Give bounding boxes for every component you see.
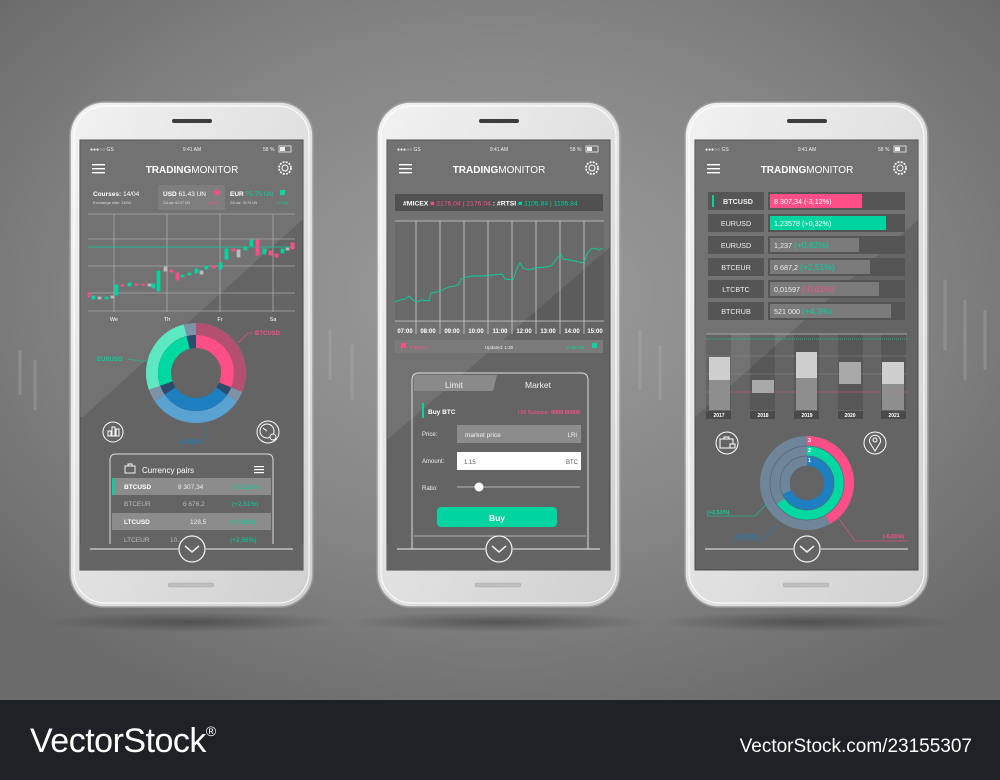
- ring chart labels: (-0,01%): [883, 534, 904, 540]
- line chart: 15:00: [587, 329, 603, 335]
- currency pairs panel: (+3,12%): [232, 484, 259, 491]
- header: TRADINGMONITOR: [453, 165, 545, 176]
- currency pairs panel: BTCEUR: [124, 501, 151, 508]
- phone 3: rates and statistics: [685, 102, 928, 607]
- ring chart labels: [707, 504, 908, 541]
- status bar: 58 %: [878, 147, 890, 153]
- courses row: EUR 75.75 UN: [230, 191, 273, 198]
- currency pairs panel: 8 307,34: [178, 484, 204, 491]
- line chart: 14:00: [564, 329, 580, 335]
- rate bars list: EURUSD: [721, 241, 751, 250]
- update bar: Updated: 1:30: [485, 345, 514, 350]
- courses row: USD 61.43 UN: [163, 191, 206, 198]
- currency pairs panel: (+2,66%): [230, 537, 257, 544]
- courses row: (+1.00): [277, 201, 288, 205]
- candlestick chart: Fr: [217, 317, 223, 323]
- yearly bar chart: 2021: [888, 413, 900, 419]
- phone 2: trade order: [377, 102, 620, 607]
- line chart: 07:00: [397, 329, 413, 335]
- scroll down button: [80, 536, 303, 570]
- donut labels: BTCUSD: [255, 331, 281, 337]
- rate bars list: 1,23578 (+0,32%): [774, 219, 831, 228]
- line chart: 11:00: [492, 329, 508, 335]
- line chart: [395, 221, 604, 335]
- currency pairs panel: [110, 454, 273, 548]
- courses row: 24Low: 62.07 UN: [163, 201, 191, 205]
- currency pairs panel: LTCUSD: [124, 519, 150, 526]
- status bar: ●●●○○ GS: [705, 147, 729, 153]
- order panel: LRI: [568, 433, 577, 439]
- update bar: 5 888.30: [410, 345, 428, 350]
- header: TRADINGMONITOR: [761, 165, 853, 176]
- order panel: Market: [525, 380, 552, 390]
- yearly bar chart: 2017: [713, 413, 725, 419]
- rate bars list: 521 000 (+4,3%): [774, 306, 832, 316]
- order panel: Buy: [489, 513, 505, 523]
- concentric ring chart: 2: [808, 448, 811, 454]
- rate bars list: 8 307,34 (-3,12%): [774, 197, 832, 206]
- status bar: [397, 146, 598, 153]
- rate bars list: 1,237 (+0,82%): [774, 240, 829, 250]
- status bar: ●●●○○ GS: [397, 147, 421, 153]
- rate bars list: 0,01597 (-0,01%): [774, 284, 835, 294]
- status bar: 58 %: [263, 147, 275, 153]
- status bar: ●●●○○ GS: [90, 147, 114, 153]
- ring chart labels: (+0,32%): [735, 534, 758, 540]
- currency pairs panel: 6 676,2: [183, 501, 205, 508]
- scroll down button: [705, 536, 908, 562]
- yearly bar chart: 2019: [801, 413, 813, 419]
- donut labels: [97, 331, 281, 446]
- phone shadows: [42, 612, 957, 632]
- currency pairs panel: 128,5: [190, 519, 207, 526]
- rate bars list: BTCRUB: [721, 307, 751, 316]
- header: TRADINGMONITOR: [146, 165, 238, 176]
- donut labels: LTCBTC: [179, 440, 203, 446]
- courses row: [93, 185, 288, 210]
- order panel: [412, 373, 588, 550]
- ticker bar: [395, 194, 603, 211]
- order panel: 1.15: [464, 460, 476, 466]
- yearly bar chart: 2020: [844, 413, 856, 419]
- order panel: BTC: [566, 460, 579, 466]
- order panel: Limit: [445, 380, 464, 390]
- currency pairs panel: (+2,86%): [230, 519, 257, 526]
- rate bars list: LTCBTC: [722, 285, 750, 294]
- header: [399, 162, 598, 176]
- donut chart: [152, 329, 240, 417]
- order panel: Ratio:: [422, 486, 438, 492]
- concentric ring chart: 3: [808, 438, 811, 444]
- footer watermark bar: ®: [206, 723, 217, 739]
- line chart: 09:00: [444, 329, 460, 335]
- courses row: 24Low: 76.76 UN: [230, 201, 258, 205]
- candlestick chart: [88, 214, 295, 323]
- footer watermark bar: VectorStock.com/23155307: [740, 736, 972, 757]
- icon: bar chart: [103, 422, 123, 442]
- yearly bar chart: 2018: [757, 413, 769, 419]
- update bar: [395, 340, 603, 353]
- header: [92, 162, 291, 176]
- scroll down button: [387, 536, 610, 570]
- rate bars list: EURUSD: [721, 219, 751, 228]
- concentric ring chart: [765, 438, 849, 525]
- status bar: 9:41 AM: [183, 147, 201, 153]
- rate bars list: [708, 192, 905, 320]
- header: [707, 162, 906, 176]
- status bar: 58 %: [570, 147, 582, 153]
- order panel: Amount:: [422, 459, 445, 465]
- icon: location pin: [864, 432, 886, 454]
- candlestick chart: We: [110, 317, 118, 323]
- status bar: 9:41 AM: [490, 147, 508, 153]
- candlestick chart: Sa: [270, 317, 277, 323]
- order panel: LRI Balance: 9000.00000: [518, 410, 580, 416]
- order panel: Price:: [422, 432, 438, 438]
- footer watermark bar: VectorStock: [30, 722, 206, 760]
- currency pairs panel: LTCEUR: [124, 537, 150, 544]
- line chart: 12:00: [516, 329, 532, 335]
- ticker bar: #MICEX ■ 2176.04 | 2176.04 : #RTSI ■ 1105.84 | 1105.84: [403, 200, 578, 208]
- decorative background candles: [20, 280, 985, 410]
- order panel: market price: [465, 432, 501, 439]
- yearly bar chart: [706, 334, 907, 419]
- ring chart labels: (+2,51%): [707, 510, 730, 516]
- footer watermark bar: [0, 700, 1000, 780]
- rate bars list: 6 687,2 (+2,51%): [774, 262, 835, 272]
- currency pairs panel: Currency pairs: [142, 466, 194, 475]
- rate bars list: BTCUSD: [723, 197, 753, 206]
- status bar: [705, 146, 906, 153]
- screen 2: [387, 140, 610, 570]
- concentric ring chart: 1: [808, 458, 811, 464]
- phone 1: currency overview: [70, 102, 313, 607]
- status bar: 9:41 AM: [798, 147, 816, 153]
- candlestick chart: Th: [164, 317, 170, 323]
- rate bars list: BTCEUR: [721, 263, 751, 272]
- screen 3: [695, 140, 918, 570]
- donut labels: EURUSD: [97, 357, 123, 363]
- currency pairs panel: (+2,51%): [232, 501, 259, 508]
- update bar: 9 450.00: [566, 345, 584, 350]
- order panel: Buy BTC: [428, 409, 456, 416]
- icon: gauge: [257, 421, 279, 443]
- courses row: Courses: 14/04: [93, 191, 140, 198]
- line chart: 08:00: [420, 329, 436, 335]
- courses row: Exchange rate: 13/04: [93, 200, 132, 205]
- currency pairs panel: 10...: [170, 537, 183, 544]
- line chart: 10:00: [468, 329, 484, 335]
- line chart: 13:00: [540, 329, 556, 335]
- icon: briefcase: [716, 432, 738, 454]
- courses row: (-0.02): [208, 201, 218, 205]
- status bar: [90, 146, 291, 153]
- screen 1: [80, 140, 303, 570]
- currency pairs panel: BTCUSD: [124, 484, 151, 491]
